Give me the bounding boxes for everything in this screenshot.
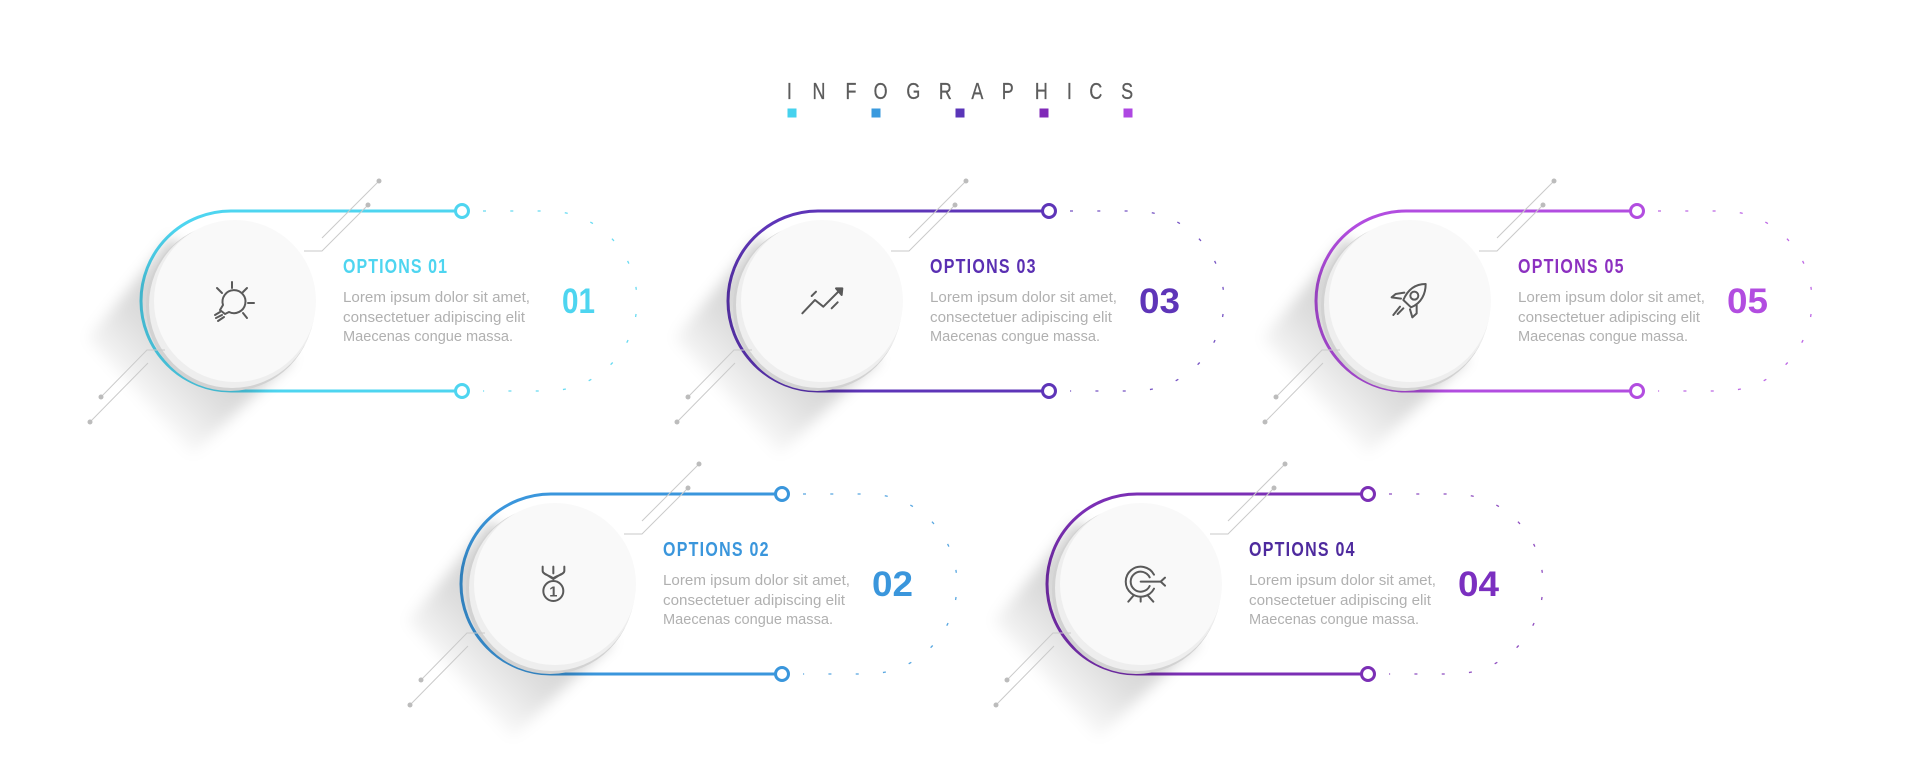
panel: option 02: Maecenas congue massa. (663, 611, 833, 628)
panel: option 04: OPTIONS 04 (1249, 538, 1355, 560)
icon: rising chart (802, 288, 842, 313)
panel: option 02: 02 (872, 565, 913, 604)
panel: option 05: OPTIONS 05 (1518, 255, 1624, 277)
panel: option 01: consectetuer adipiscing elit (343, 309, 526, 326)
panel: option 02: OPTIONS 02 (663, 538, 769, 560)
panel: option 04: consectetuer adipiscing elit (1249, 592, 1432, 609)
panel: option 04: 04 (1458, 565, 1500, 604)
panel: option 03: Lorem ipsum dolor sit amet, (930, 289, 1117, 306)
panel: option 03: OPTIONS 03 (930, 255, 1036, 277)
icon: medal (543, 567, 564, 601)
icon: rocket (1392, 284, 1426, 317)
panel: option 03: 03 (1139, 282, 1180, 321)
panel: option 02 (408, 462, 957, 738)
panel: option 05: consectetuer adipiscing elit (1518, 309, 1701, 326)
icon: target (1126, 567, 1165, 602)
panel: option 01: Maecenas congue massa. (343, 328, 513, 345)
panel: option 01: OPTIONS 01 (343, 255, 447, 277)
panel: option 03 (674, 178, 1224, 455)
title: INFOGRAPHICS (787, 79, 1133, 105)
panel: option 01: 01 (562, 282, 595, 321)
panel: option 05: Lorem ipsum dolor sit amet, (1518, 289, 1705, 306)
title (787, 79, 1133, 118)
panel: option 05: Maecenas congue massa. (1518, 328, 1688, 345)
panel: option 05: 05 (1727, 282, 1768, 321)
icon: medal: 1 (549, 584, 557, 600)
panel: option 04 (994, 462, 1543, 738)
panel: option 03: consectetuer adipiscing elit (930, 309, 1113, 326)
panel: option 03: Maecenas congue massa. (930, 328, 1100, 345)
panel: option 01 (88, 178, 637, 455)
panel: option 04: Lorem ipsum dolor sit amet, (1249, 572, 1436, 589)
panel: option 02: consectetuer adipiscing elit (663, 592, 846, 609)
panel: option 05 (1262, 178, 1812, 455)
panel: option 01: Lorem ipsum dolor sit amet, (343, 289, 530, 306)
icon: light bulb (215, 282, 254, 321)
panel: option 04: Maecenas congue massa. (1249, 611, 1419, 628)
panel: option 02: Lorem ipsum dolor sit amet, (663, 572, 850, 589)
